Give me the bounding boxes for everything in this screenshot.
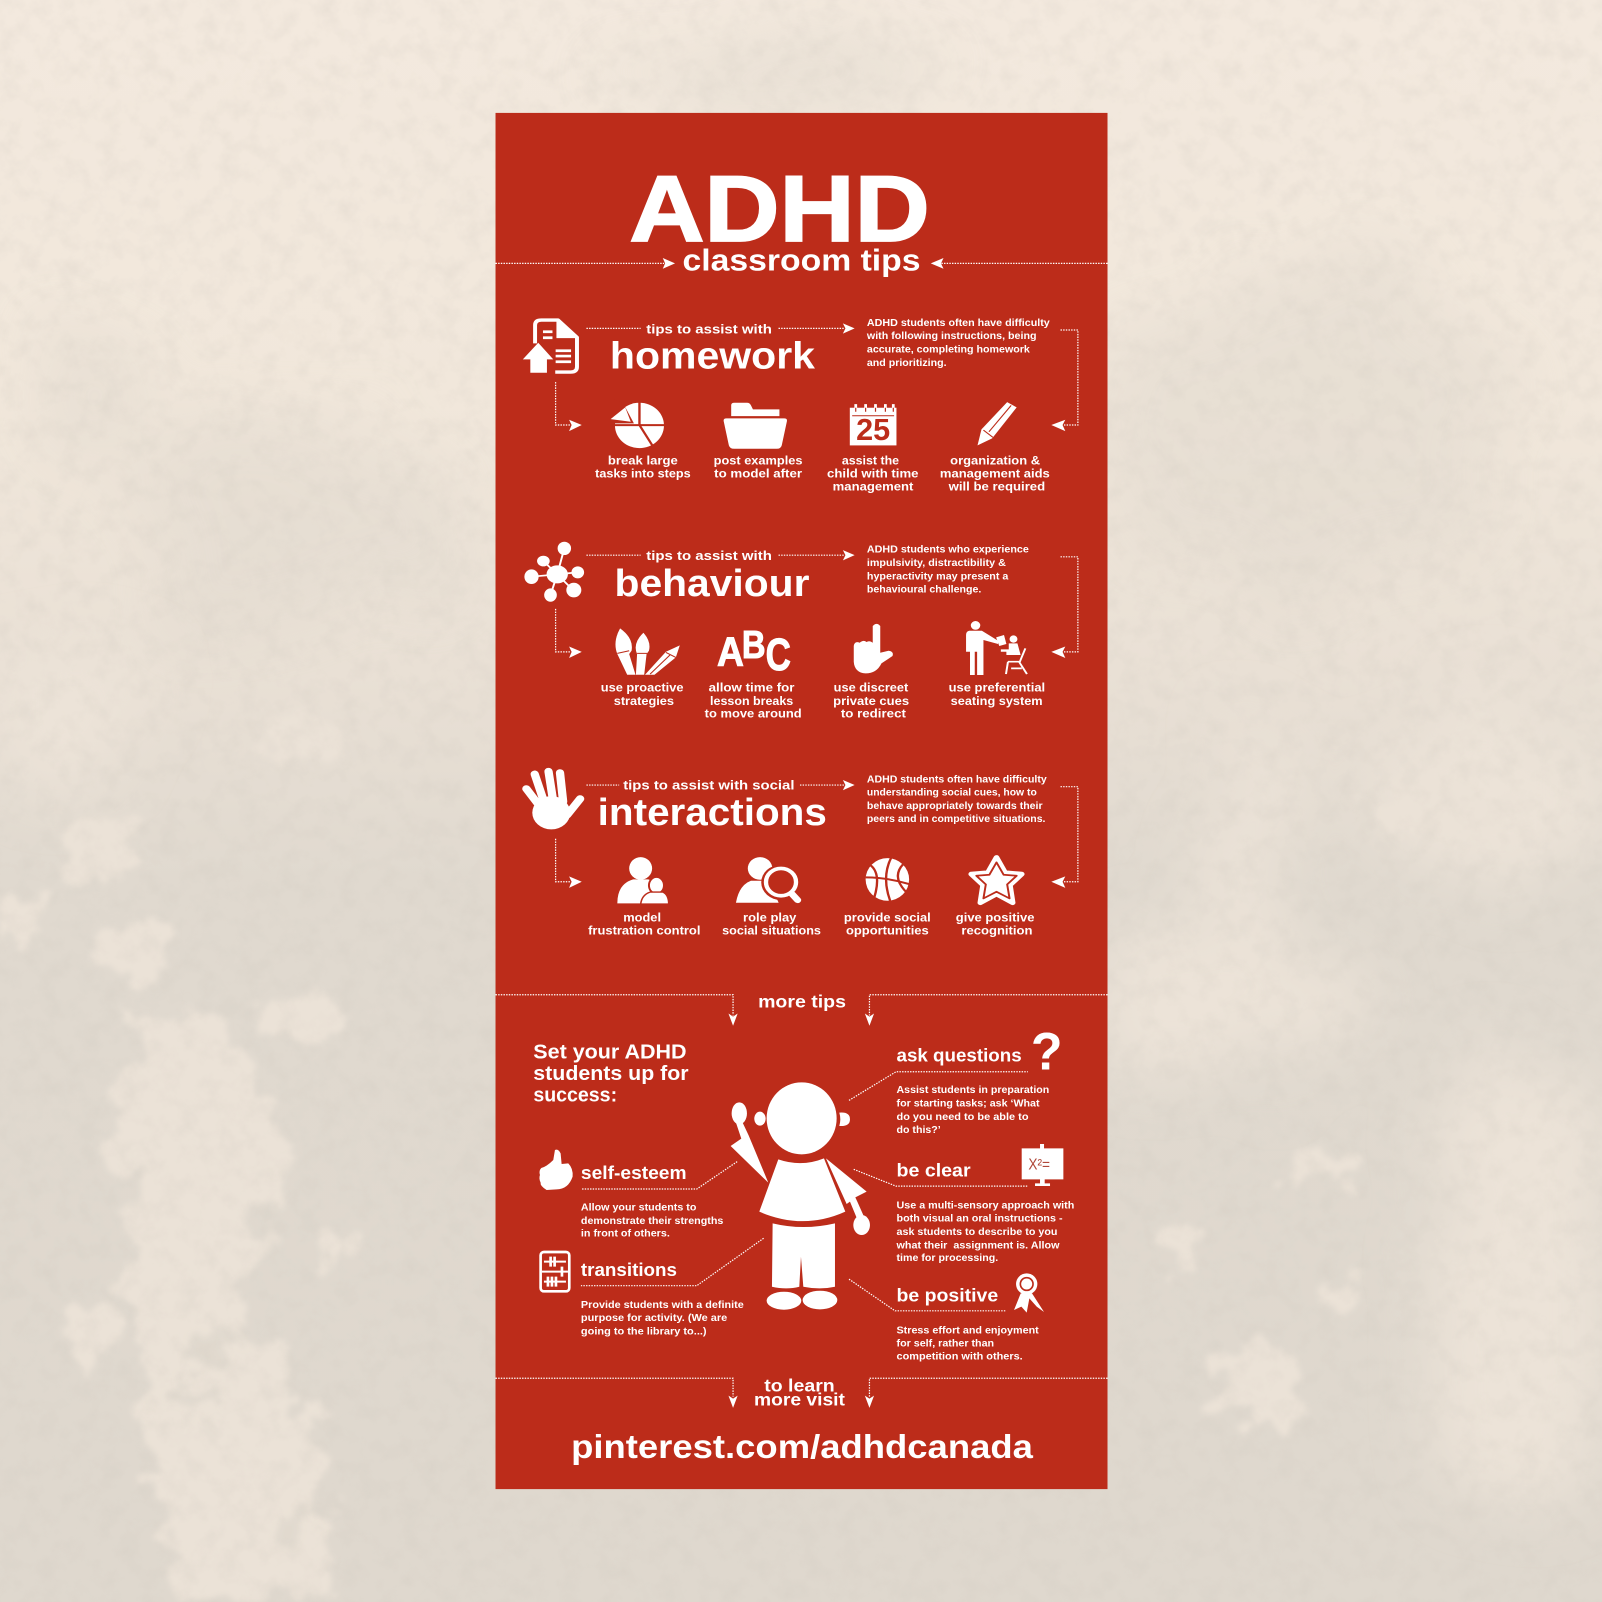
tip: organization aids: organization & [950, 453, 1041, 467]
icon: pointing hand [854, 624, 893, 673]
icon: ABC letters: B [742, 623, 766, 667]
tip: break large tasks: tasks into steps [595, 466, 691, 480]
text block: homework description: and prioritizing. [867, 358, 947, 369]
icon: folder [724, 403, 787, 449]
callout: ask questions [849, 1023, 1063, 1136]
callout: ask questions: Assist students in preparation [897, 1085, 1049, 1096]
icon: award ribbon [1014, 1273, 1044, 1313]
callout: transitions [541, 1238, 764, 1337]
panel: homework [523, 318, 1078, 493]
arrow: right connector [1051, 330, 1078, 431]
tip: break large tasks: break large [608, 453, 678, 467]
tip: lesson breaks: to move around [705, 707, 802, 721]
tip: role play: social situations [722, 923, 821, 937]
callout: transitions: purpose for activity. (We are [581, 1313, 728, 1324]
shoes [767, 1291, 837, 1310]
tip: social opportunities [844, 911, 931, 937]
callout: be positive: be positive [897, 1286, 998, 1307]
panel: footer [496, 1376, 1108, 1466]
icon: question mark: ? [1031, 1023, 1063, 1082]
tip: time management: assist the [842, 453, 900, 467]
callout: transitions: Provide students with a definite [581, 1300, 744, 1311]
lowered arm [826, 1158, 870, 1235]
icon: pencil [978, 402, 1017, 445]
text block: interactions description: behave appropriately towards their [867, 801, 1043, 812]
icon: person with magnifier [736, 857, 801, 903]
text block: interactions description [867, 774, 1047, 825]
callout: ask questions: ask questions [897, 1046, 1022, 1067]
tip: role play [722, 911, 821, 937]
heading label: tips to assist with [646, 321, 772, 336]
tip: role play: role play [743, 911, 797, 925]
callout: be positive [849, 1273, 1044, 1362]
icon: brushes and pencil [615, 628, 680, 675]
tip: discreet cues: to redirect [841, 707, 906, 721]
icon: whiteboard: X²= [1028, 1156, 1050, 1173]
callout: be clear [854, 1144, 1074, 1264]
tip: post examples: post examples [714, 453, 803, 467]
arrow: left connector [556, 839, 582, 888]
tip: frustration control: frustration control [588, 923, 700, 937]
tip: discreet cues: private cues [833, 694, 910, 708]
icon: calendar 25: 25 [856, 414, 890, 447]
callout: be positive: for self, rather than [897, 1339, 994, 1350]
text: to learn more visit [754, 1376, 845, 1410]
icon: abacus [541, 1252, 569, 1291]
callout: be positive: Stress effort and enjoyment [897, 1325, 1040, 1336]
callout: self-esteem: self-esteem [581, 1163, 687, 1184]
raised arm [731, 1102, 768, 1183]
trousers [772, 1223, 835, 1288]
tip: break large tasks [595, 453, 691, 480]
icon: calendar 25 [850, 404, 896, 447]
arrow: heading to description [586, 550, 855, 560]
panel: more tips [496, 991, 1108, 1362]
tip: discreet cues [833, 681, 910, 721]
panel: red poster [496, 113, 1108, 1489]
arrow: left title rule [496, 258, 675, 269]
tip: preferential seating: use preferential [949, 681, 1045, 695]
tip: discreet cues: use discreet [834, 681, 908, 695]
tip: positive recognition [956, 911, 1035, 937]
heading: set your students up for success: students up for [533, 1063, 689, 1085]
icon: adult and child [617, 857, 669, 904]
tip: proactive strategies [601, 681, 684, 708]
ears [754, 1112, 850, 1126]
icon: molecule network [524, 542, 584, 602]
text block: homework description: ADHD students often have difficulty [867, 318, 1050, 329]
tip: time management: child with time [827, 466, 919, 480]
tip: organization aids: will be required [948, 479, 1045, 493]
icon: pie chart [609, 397, 666, 450]
text block: behaviour description: impulsivity, distractibility & [867, 558, 1006, 569]
tip: time management [827, 453, 919, 493]
callout: ask questions: do this?’ [897, 1125, 941, 1136]
icon: thumbs up [539, 1150, 573, 1190]
arrow: right connector [1051, 557, 1078, 658]
shirt [759, 1158, 845, 1221]
callout: transitions: transitions [581, 1260, 677, 1281]
text block: behaviour description: ADHD students who experience [867, 545, 1029, 556]
heading: set your students up for success [533, 1041, 689, 1106]
tip: post examples [714, 453, 803, 480]
callout: transitions: going to the library to...) [581, 1326, 707, 1337]
callout: ask questions: do you need to be able to [897, 1112, 1029, 1123]
callout: ask questions: for starting tasks; ask ‘What [897, 1098, 1040, 1109]
callout: self-esteem: in front of others. [581, 1229, 670, 1240]
callout: self-esteem [539, 1150, 737, 1240]
heading: set your students up for success: success: [533, 1084, 617, 1106]
tip: time management: management [833, 479, 913, 493]
heading: classroom tips: classroom tips [682, 244, 921, 278]
callout: be positive: competition with others. [897, 1351, 1023, 1362]
text: website address: pinterest.com/adhdcanada [571, 1428, 1033, 1466]
heading: ADHD: ADHD [629, 156, 930, 261]
arrow: right title rule [931, 258, 1108, 269]
callout: be clear: what their assignment is. Allow [895, 1240, 1060, 1251]
text block: interactions description: ADHD students often have difficulty [867, 774, 1047, 785]
arrow: left more tips [496, 995, 738, 1026]
head [767, 1082, 837, 1154]
text: to learn more visit: to learn [764, 1376, 835, 1396]
tip: lesson breaks [705, 681, 802, 721]
tip: social opportunities: opportunities [846, 923, 929, 937]
arrow: left footer [496, 1378, 738, 1408]
tip: lesson breaks: allow time for [709, 681, 795, 695]
arrow: heading to description [586, 323, 855, 334]
heading: more tips: more tips [758, 991, 846, 1011]
icon: open hand [526, 771, 580, 829]
tip: proactive strategies: strategies [614, 694, 674, 708]
heading: interactions: interactions [598, 792, 827, 834]
icon: ABC letters: C [766, 630, 791, 680]
heading label: tips to assist with [646, 548, 772, 563]
text block: behaviour description [867, 545, 1029, 596]
tip: organization aids: management aids [940, 466, 1050, 480]
icon: teacher and seated student [966, 621, 1027, 675]
heading: set your students up for success: Set your ADHD [533, 1041, 687, 1063]
text: to learn more visit: more visit [754, 1390, 845, 1410]
heading: homework: homework [610, 335, 816, 377]
title [496, 156, 1108, 278]
callout: be clear: time for processing. [897, 1253, 998, 1264]
panel: behaviour [524, 542, 1078, 721]
arrow: right more tips [865, 995, 1108, 1026]
arrow: right footer [865, 1378, 1108, 1408]
heading label: tips to assist with social [623, 777, 794, 792]
text block: homework description [866, 318, 1050, 369]
panel: social interactions [526, 771, 1078, 937]
icon: ABC letters [717, 623, 791, 680]
arrow: left connector [556, 382, 582, 431]
arrow: right connector [1051, 787, 1078, 888]
icon: ABC letters: A [717, 630, 744, 675]
callout: be clear: both visual an oral instructions - [897, 1214, 1063, 1225]
tip: post examples: to model after [714, 466, 802, 480]
figure: child raising hand [731, 1082, 870, 1310]
tip: social opportunities: provide social [844, 911, 931, 925]
callout: self-esteem: demonstrate their strengths [581, 1216, 724, 1227]
text block: behaviour description: hyperactivity may present a [867, 571, 1009, 582]
arrow: heading to description [586, 780, 855, 790]
callout: be clear: be clear [897, 1161, 971, 1182]
icon: document with upload arrow [523, 320, 577, 373]
arrow: left connector [556, 609, 582, 658]
tip: organization aids [940, 453, 1050, 493]
tip: frustration control [588, 911, 700, 937]
tip: positive recognition: recognition [961, 923, 1033, 937]
tip: proactive strategies: use proactive [601, 681, 684, 695]
text block: homework description: with following instructions, being [866, 331, 1037, 342]
text block: interactions description: peers and in competitive situations. [867, 814, 1046, 825]
tip: frustration control: model [623, 911, 661, 925]
heading: behaviour: behaviour [615, 563, 810, 605]
callout: be clear: Use a multi-sensory approach with [897, 1200, 1074, 1211]
callout: be clear: ask students to describe to you [897, 1227, 1057, 1238]
icon: star badge [971, 857, 1022, 903]
tip: positive recognition: give positive [956, 911, 1035, 925]
tip: preferential seating [949, 681, 1045, 708]
icon: whiteboard [1022, 1144, 1063, 1186]
icon: basketball [866, 857, 909, 901]
text block: interactions description: understanding social cues, how to [867, 788, 1037, 799]
text block: behaviour description: behavioural challenge. [867, 585, 982, 596]
tip: preferential seating: seating system [951, 694, 1043, 708]
tip: lesson breaks: lesson breaks [710, 694, 794, 708]
callout: self-esteem: Allow your students to [581, 1203, 696, 1214]
text block: homework description: accurate, completing homework [867, 345, 1030, 356]
